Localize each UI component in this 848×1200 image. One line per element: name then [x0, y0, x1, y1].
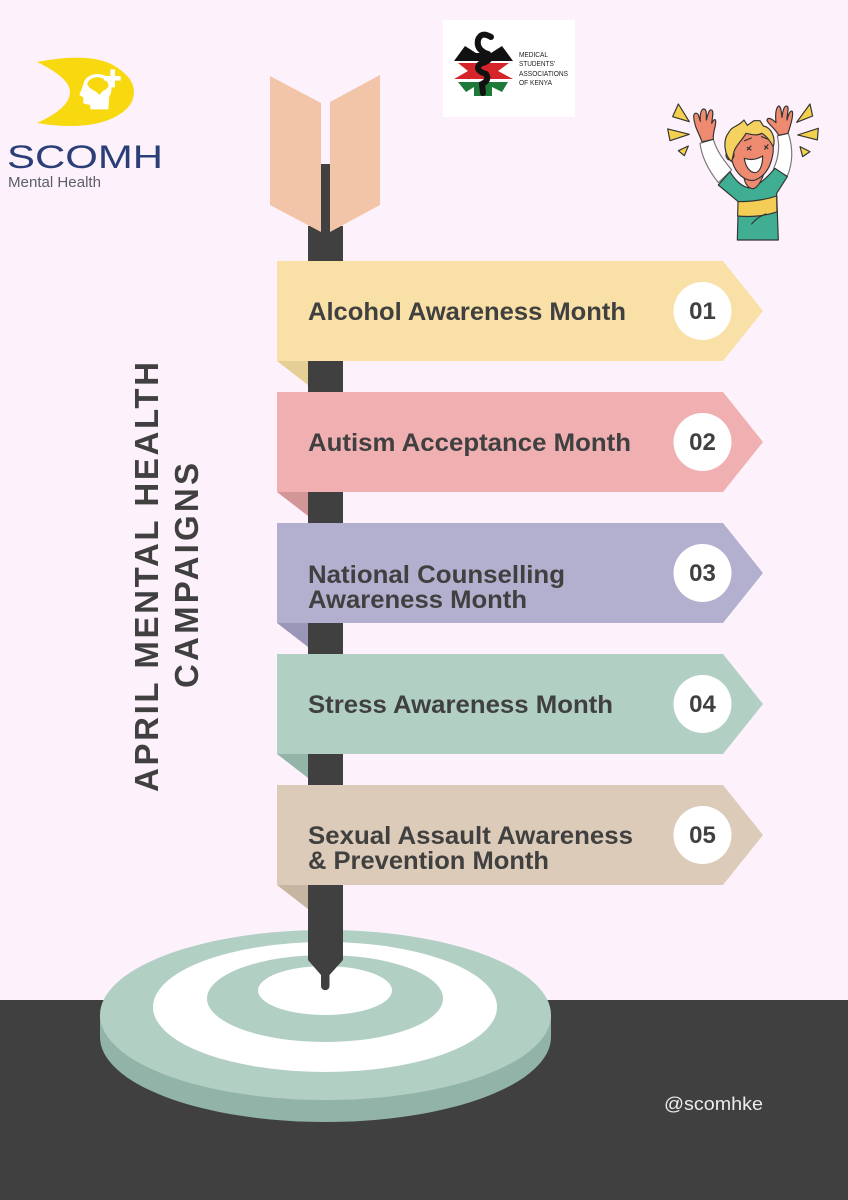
- logo wordmark: MEDICAL: [519, 50, 548, 59]
- banner 03: 03: [689, 560, 716, 587]
- banner 03: [277, 523, 763, 647]
- neck: [744, 173, 764, 189]
- arms: [700, 133, 792, 183]
- logo wordmark: STUDENTS': [519, 59, 556, 68]
- banner 02: 02: [689, 429, 716, 456]
- hair: [725, 120, 774, 162]
- vertical title: APRIL MENTAL HEALTH: [128, 362, 165, 792]
- shirt stripe: [738, 196, 777, 216]
- SCOMH logo: Mental Health: [8, 175, 101, 191]
- shirt: [718, 168, 787, 240]
- banner 05: [277, 785, 763, 909]
- SCOMH logo: SCOMH: [7, 139, 163, 175]
- logo wordmark: [519, 50, 568, 87]
- SCOMH logo: [7, 58, 163, 191]
- vertical title: CAMPAIGNS: [168, 463, 205, 688]
- banner 01: 01: [689, 298, 716, 325]
- target board: [100, 930, 551, 1122]
- banner 04: 04: [689, 691, 716, 718]
- shirt crease: [752, 214, 766, 224]
- banner 01: [277, 261, 763, 385]
- banner 03: Awareness Month: [308, 586, 527, 614]
- logo wordmark: ASSOCIATIONS: [519, 69, 568, 78]
- banner 04: [277, 654, 763, 778]
- banner 05: 05: [689, 822, 716, 849]
- hands: [694, 106, 793, 142]
- icon: star of life with Kenyan colours: [454, 35, 513, 96]
- banner 05: & Prevention Month: [308, 847, 549, 875]
- mouth: [744, 156, 763, 173]
- ear: [726, 150, 734, 160]
- Medical Students' Associations of Kenya logo: [443, 20, 575, 117]
- banner 04: Stress Awareness Month: [308, 691, 613, 719]
- banner 03: National Counselling: [308, 561, 565, 589]
- banner 02: [277, 392, 763, 516]
- vertical title: [128, 362, 205, 792]
- illustration: cheering boy: [668, 104, 818, 240]
- burst marks: [668, 104, 818, 157]
- arrow shaft: [308, 226, 343, 990]
- social handle: @scomhke: [664, 1094, 763, 1114]
- arrow fletching: [270, 75, 380, 234]
- eyes: [745, 137, 768, 150]
- banner 02: Autism Acceptance Month: [308, 429, 631, 457]
- banner 01: Alcohol Awareness Month: [308, 298, 626, 326]
- icon: yellow crescent with head: [37, 58, 134, 126]
- logo wordmark: OF KENYA: [519, 78, 552, 87]
- dark ground band: [0, 1000, 848, 1200]
- face: [731, 130, 773, 180]
- banner 05: Sexual Assault Awareness: [308, 822, 633, 850]
